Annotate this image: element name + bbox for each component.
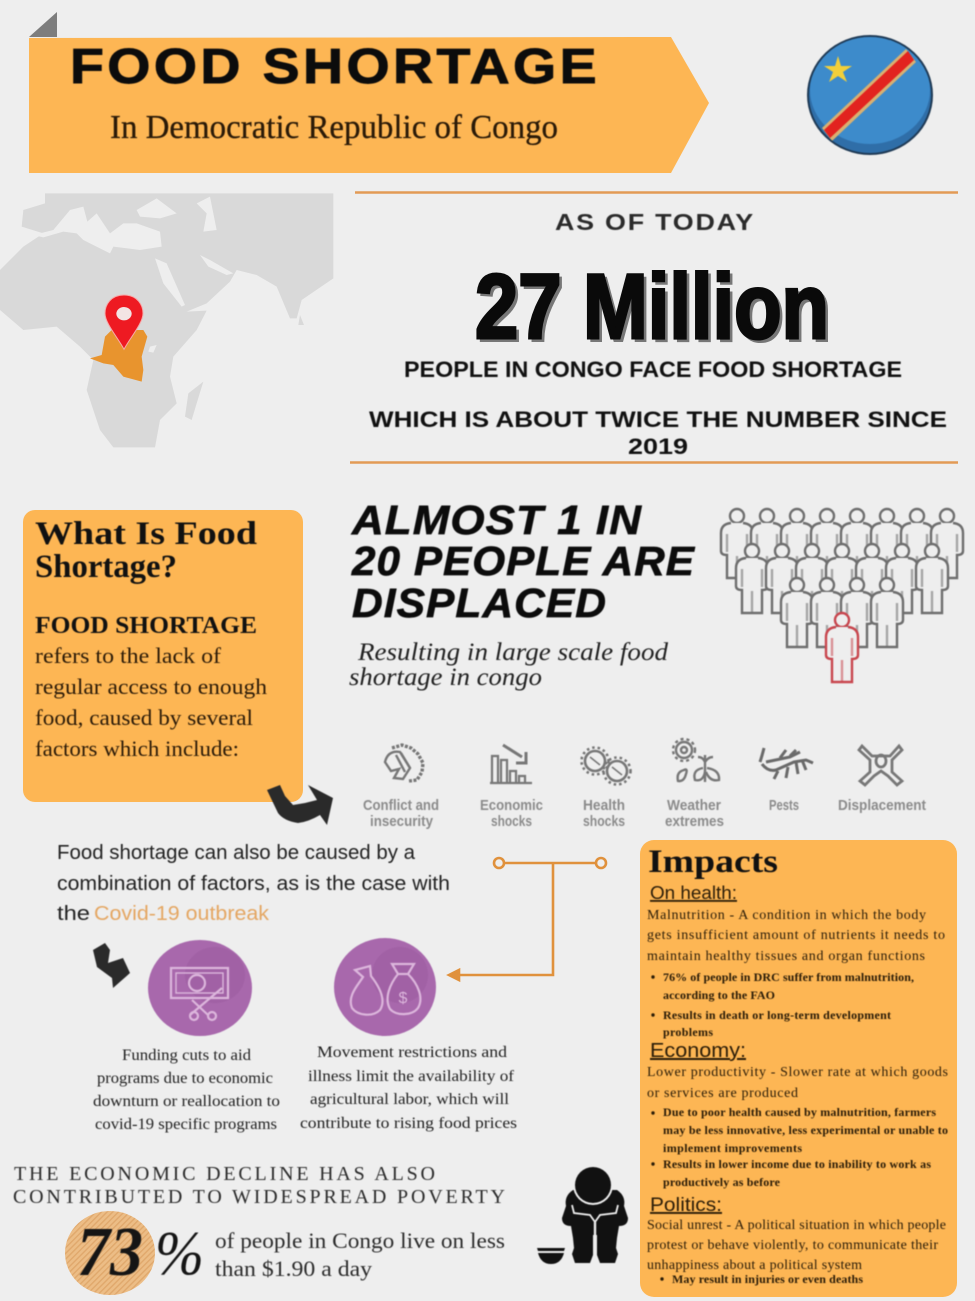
panel: impacts — [640, 840, 957, 1297]
impacts: economy: Economy: — [650, 1040, 746, 1062]
caption: funding cuts — [93, 1047, 280, 1133]
impacts: on health: On health: — [650, 883, 737, 903]
cause: conflict and insecurity: insecurity — [370, 813, 434, 830]
icon: crowd of people — [721, 509, 963, 682]
impacts: economy: implement improvements — [663, 1141, 802, 1155]
caption: movement restrictions: contribute to rising food prices — [300, 1115, 517, 1132]
text: combination of factors: combination of factors, as is the case with — [57, 873, 450, 895]
map of Africa and Congo — [0, 193, 333, 447]
caption: funding cuts: downturn or reallocation to — [93, 1093, 280, 1110]
twice the number text: 2019 — [628, 434, 688, 459]
caption: movement restrictions: Movement restrictions and — [317, 1044, 507, 1061]
as of today label: AS OF TODAY — [555, 209, 755, 235]
text: people live on less — [215, 1228, 505, 1281]
cause: economic shocks — [480, 745, 543, 830]
heading: almost 1 in 20 displaced — [351, 497, 696, 626]
impacts: politics: protest or behave violently, to communicate their — [647, 1238, 938, 1253]
heading: almost 1 in 20 displaced: 20 PEOPLE ARE — [351, 538, 696, 584]
cause: weather extremes — [665, 739, 724, 830]
text: combination of factors: the — [57, 903, 90, 925]
caption: movement restrictions: agricultural labor, which will — [310, 1091, 510, 1108]
causes row — [363, 739, 926, 830]
panel definition text: regular access to enough — [35, 674, 267, 699]
text: people live on less: than $1.90 a day — [215, 1256, 372, 1281]
heading: economic decline: CONTRIBUTED TO WIDESPREAD POVERTY — [13, 1186, 505, 1208]
icon: person with bowl — [537, 1165, 628, 1265]
twice the number text — [369, 407, 947, 459]
panel definition text: food, caused by several — [35, 705, 253, 730]
icon: money bags circle: $ — [399, 990, 408, 1007]
impacts: economy: Due to poor health caused by malnutrition, farmers — [663, 1105, 936, 1119]
twice the number text: WHICH IS ABOUT TWICE THE NUMBER SINCE — [369, 407, 947, 432]
panel heading: Shortage? — [35, 549, 177, 585]
heading: almost 1 in 20 displaced: DISPLACED — [352, 580, 607, 626]
caption: movement restrictions: illness limit the availability of — [308, 1068, 515, 1085]
impacts: economy: or services are produced — [647, 1086, 798, 1101]
statistics block: as of today — [350, 192, 958, 462]
caption: funding cuts: covid-19 specific programs — [95, 1116, 277, 1133]
impacts: on health: maintain healthy tissues and organ functions — [647, 949, 925, 964]
impacts: on health: Malnutrition - A condition in which the body — [647, 908, 926, 923]
cause: economic shocks: Economic — [480, 797, 543, 814]
panel definition text — [35, 613, 267, 761]
resulting text: shortage in congo — [349, 664, 542, 691]
caption: funding cuts: programs due to economic — [97, 1070, 273, 1087]
impacts: on health: according to the FAO — [663, 988, 775, 1002]
cause: health shocks: Health — [583, 797, 625, 814]
impacts: economy: Lower productivity - Slower rate at which goods — [647, 1065, 948, 1080]
cause: health shocks: shocks — [583, 813, 625, 830]
impacts: economy: Results in lower income due to inability to work as — [663, 1157, 931, 1171]
big number: 27 Million — [475, 256, 829, 358]
caption: funding cuts: Funding cuts to aid — [122, 1047, 251, 1064]
impacts: politics: unhappiness about a political system — [647, 1258, 862, 1273]
cause: displacement: Displacement — [838, 797, 926, 814]
panel heading — [35, 516, 257, 585]
icon: funding cuts circle — [148, 940, 252, 1036]
resulting text — [349, 639, 669, 691]
impacts: politics: May result in injuries or even deaths — [672, 1272, 863, 1286]
impacts: on health: problems — [663, 1025, 713, 1039]
text: people live on less: of people in Congo live on less — [215, 1228, 505, 1253]
impacts: economy: productively as before — [663, 1175, 781, 1189]
panel definition text: refers to the lack of — [35, 643, 222, 668]
cause: weather extremes: extremes — [665, 813, 724, 830]
impacts: on health: 76% of people in DRC suffer from malnutrition, — [663, 970, 914, 984]
text: combination of factors: Covid-19 outbreak — [94, 903, 270, 925]
impacts: on health: gets insufficient amount of nutrients it needs to — [647, 928, 945, 943]
icon: money bags circle — [334, 938, 436, 1036]
impacts heading: Impacts — [648, 844, 778, 880]
statistic: 73 percent — [65, 1211, 204, 1295]
impacts: politics: Politics: — [650, 1195, 722, 1216]
connector arrow — [449, 858, 606, 980]
cause: displacement — [838, 746, 926, 814]
arrow: small curved arrow — [93, 943, 130, 988]
subtitle: In Democratic Republic of Congo — [110, 109, 558, 146]
icon: DRC flag — [806, 34, 934, 156]
cause: economic shocks: shocks — [491, 813, 532, 830]
statistic: 73 percent: 73 — [77, 1214, 143, 1291]
impacts: on health — [647, 883, 945, 1039]
caption: movement restrictions — [300, 1044, 517, 1132]
cause: weather extremes: Weather — [667, 797, 721, 814]
cause: conflict and insecurity: Conflict and — [363, 797, 439, 814]
header banner — [29, 12, 709, 173]
panel heading: What Is Food — [35, 516, 257, 552]
title: FOOD SHORTAGE — [70, 40, 600, 94]
statistic: 73 percent: % — [155, 1220, 204, 1288]
heading: almost 1 in 20 displaced: ALMOST 1 IN — [351, 497, 642, 543]
arrow: curved arrow to causes — [267, 785, 333, 825]
resulting text: Resulting in large scale food — [357, 639, 669, 666]
heading: economic decline: THE ECONOMIC DECLINE HAS ALSO — [14, 1163, 435, 1185]
icon: location pin — [105, 295, 143, 349]
cause: health shocks — [582, 748, 630, 830]
cause: pests: Pests — [769, 797, 799, 814]
big number: 27 Million — [478, 259, 832, 361]
text: combination of factors — [57, 842, 450, 925]
impacts: politics — [647, 1195, 946, 1286]
impacts: politics: Social unrest - A political situation in which people — [647, 1218, 946, 1233]
panel definition text: factors which include: — [35, 736, 239, 761]
impacts: economy: may be less innovative, less experimental or unable to — [663, 1123, 948, 1137]
people face shortage text: PEOPLE IN CONGO FACE FOOD SHORTAGE — [404, 357, 902, 382]
text: combination of factors: Food shortage can also be caused by a — [57, 842, 416, 864]
impacts: on health: Results in death or long-term development — [663, 1008, 891, 1022]
panel definition text: FOOD SHORTAGE — [35, 613, 257, 639]
cause: pests — [760, 748, 813, 814]
impacts: economy — [647, 1040, 948, 1189]
heading: economic decline — [13, 1163, 505, 1208]
panel: what is food shortage — [23, 510, 303, 802]
cause: conflict and insecurity — [363, 745, 439, 830]
